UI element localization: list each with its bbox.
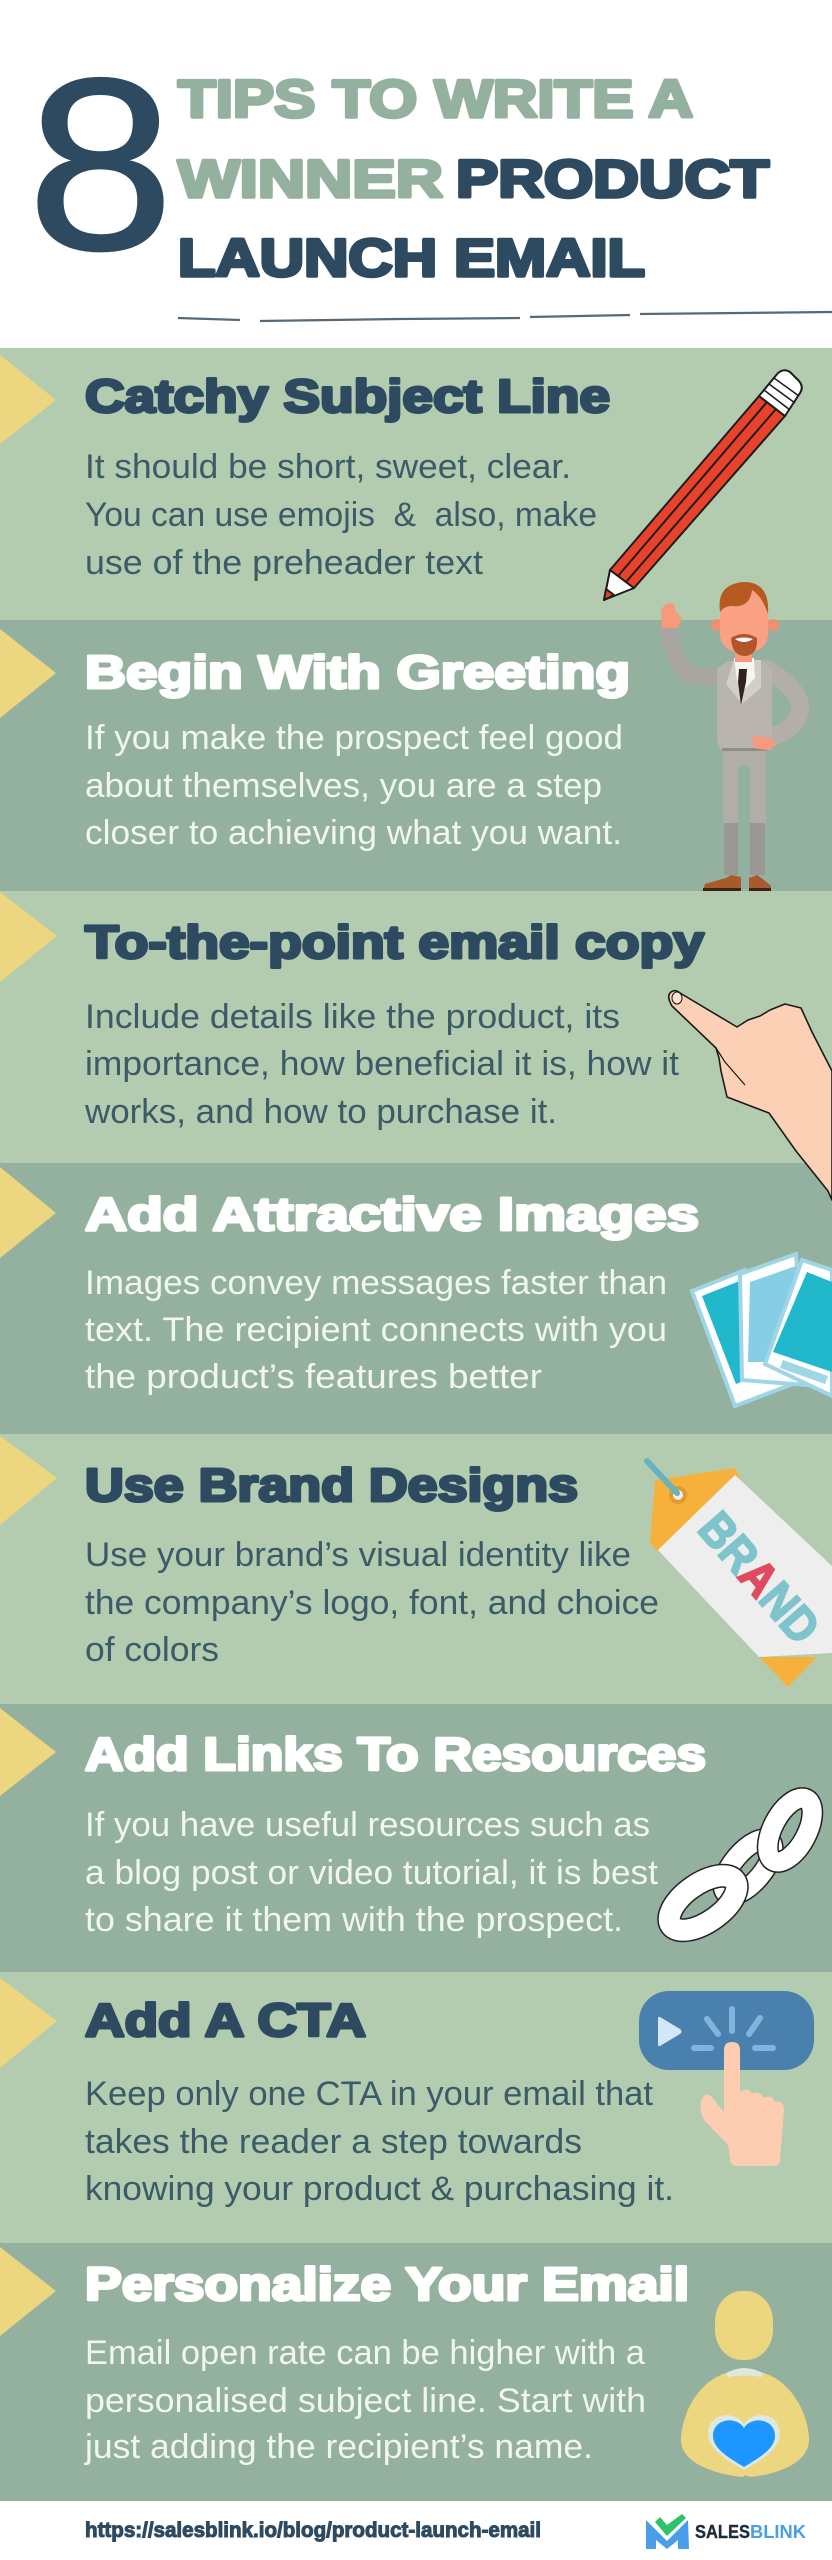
icon: pointing hand [669, 991, 832, 1200]
body 5 [85, 1536, 659, 1669]
body 3 [84, 998, 680, 1131]
body 8: personalised subject line. Start with [85, 2382, 646, 2420]
body 4: the product’s features better [85, 1358, 542, 1396]
heading 4: Add Attractive Images [85, 1188, 699, 1240]
tag word: BRAND [688, 1502, 829, 1654]
logo: salesblink [646, 2514, 806, 2549]
body 3: importance, how beneficial it is, how it [85, 1045, 680, 1083]
body 8 [84, 2334, 646, 2466]
body 2: closer to achieving what you want. [85, 814, 622, 852]
body 2 [85, 719, 623, 852]
heading 5: Use Brand Designs [85, 1459, 578, 1511]
body 7: Keep only one CTA in your email that [85, 2075, 654, 2113]
panel: add a cta [0, 1972, 832, 2243]
title line 1: TIPS TO WRITE A [178, 70, 693, 129]
body 3: works, and how to purchase it. [84, 1093, 557, 1131]
heading 3: To-the-point email copy [85, 916, 704, 968]
heading 6: Add Links To Resources [85, 1728, 706, 1780]
body 4: Images convey messages faster than [85, 1264, 667, 1302]
panel: add attractive images [0, 1163, 832, 1434]
heading 1: Catchy Subject Line [85, 370, 610, 422]
body 6: If you have useful resources such as [85, 1806, 650, 1844]
icon: stacked photos [692, 1254, 832, 1406]
title line 2 accent: WINNER [178, 150, 443, 209]
panel: personalize your email [0, 2243, 832, 2501]
body 5: Use your brand’s visual identity like [85, 1536, 631, 1574]
panel: catchy subject line [0, 348, 832, 620]
icon: cta button with hand [639, 1991, 814, 2166]
body 8: just adding the recipient’s name. [84, 2428, 593, 2466]
body 7: knowing your product & purchasing it. [85, 2170, 674, 2208]
footer [85, 2514, 806, 2549]
big number 8: 8 [27, 27, 174, 301]
heading 7: Add A CTA [85, 1994, 366, 2046]
icon: person holding heart [681, 2291, 809, 2477]
body 1: You can use emojis & also, make [85, 496, 597, 534]
body 6: to share it them with the prospect. [85, 1901, 623, 1939]
title [27, 27, 769, 301]
logo: salesblink: BLINK [750, 2522, 806, 2542]
panel: add links to resources [0, 1704, 832, 1972]
icon: brand tag [647, 1461, 832, 1687]
source url: https://salesblink.io/blog/product-launch-email [85, 2519, 541, 2542]
icon: chain links [660, 1791, 821, 1941]
body 1 [85, 448, 597, 582]
body 7 [85, 2075, 674, 2208]
heading 8: Personalize Your Email [85, 2258, 689, 2310]
panel: use brand designs [0, 1434, 832, 1704]
body 2: If you make the prospect feel good [85, 719, 623, 757]
body 1: use of the preheader text [85, 544, 484, 582]
panel: begin with greeting [0, 582, 832, 891]
title line 3: LAUNCH EMAIL [178, 229, 645, 288]
body 6: a blog post or video tutorial, it is best [85, 1854, 659, 1892]
icon: waving man [661, 582, 800, 891]
body 8: Email open rate can be higher with a [85, 2334, 645, 2372]
logo: salesblink: SALES [695, 2522, 750, 2542]
panel: to-the-point email copy [0, 891, 832, 1163]
body 1: It should be short, sweet, clear. [85, 448, 571, 486]
heading 2: Begin With Greeting [85, 646, 630, 698]
body 7: takes the reader a step towards [85, 2123, 582, 2161]
title line 2 dark: PRODUCT [456, 150, 769, 209]
body 3: Include details like the product, its [85, 998, 620, 1036]
body 4: text. The recipient connects with you [85, 1311, 667, 1349]
icon: pencil [604, 370, 802, 600]
body 5: the company’s logo, font, and choice [85, 1584, 659, 1622]
body 5: of colors [85, 1631, 219, 1669]
body 2: about themselves, you are a step [85, 767, 602, 805]
body 6 [85, 1806, 659, 1939]
body 4 [85, 1264, 667, 1396]
